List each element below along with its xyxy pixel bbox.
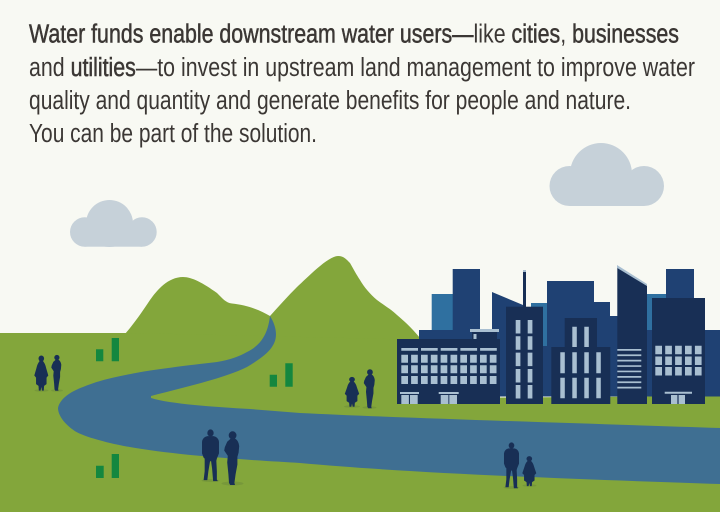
intro text block [29,20,695,148]
people: right pair [504,442,536,489]
icon: large cloud [550,143,664,206]
people: front pair [202,429,244,486]
slanted tower [617,265,647,404]
icon: small cloud [70,200,157,247]
people: left pair [34,355,63,392]
back buildings [419,269,720,396]
mountains [125,256,420,400]
city skyline [397,265,720,404]
right block [652,298,705,404]
people: centre pair [344,369,376,409]
bar icon: left [96,338,119,361]
text line 4: You can be part of the solution. [29,120,317,148]
bar icon: bottom [96,454,119,478]
stepped tower [551,318,610,404]
text line 1: Water funds enable downstream water users—like cities, businesses [29,20,679,48]
bar icon: centre [270,363,293,387]
antenna tower [506,270,543,404]
river [58,316,720,484]
office block [397,329,500,404]
ground [0,333,720,512]
